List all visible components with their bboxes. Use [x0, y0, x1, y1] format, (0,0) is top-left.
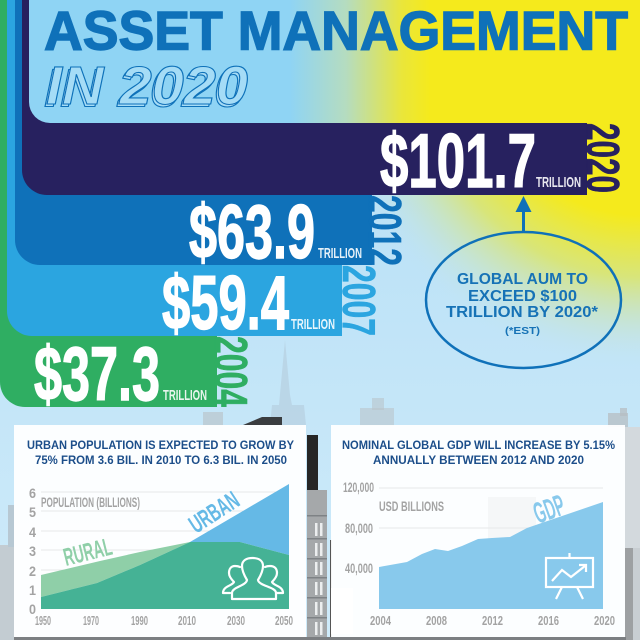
x axis labels: 2008 [426, 613, 447, 628]
callout oval [426, 232, 621, 368]
y axis labels: 40,000 [345, 561, 373, 576]
x axis labels: 1950 [35, 613, 51, 628]
arrow to 2020 bar [516, 196, 532, 233]
label: GDP: GDP [529, 489, 570, 531]
year 2004: 2004 [205, 336, 257, 407]
year 2012: 2012 [359, 195, 411, 266]
urban heading: URBAN POPULATION IS EXPECTED TO GROW BY [27, 440, 294, 452]
value 2012: $63.9 [189, 190, 315, 275]
panel: global GDP [331, 425, 625, 637]
callout text: TRILLION BY 2020* [446, 304, 599, 321]
y axis labels: 80,000 [345, 521, 373, 536]
green bar: 2004 [0, 0, 257, 417]
urban heading [27, 440, 294, 467]
axis title: USD BILLIONS [379, 499, 444, 514]
x axis labels: 1990 [131, 613, 148, 628]
x axis labels: 2050 [275, 613, 293, 628]
unit 2007: TRILLION [291, 316, 335, 333]
title: ASSET MANAGEMENT [44, 0, 628, 62]
subtitle: in 2020: IN 2020 [46, 56, 248, 116]
label: urban: URBAN [184, 486, 245, 539]
year 2020: 2020 [577, 123, 629, 193]
value 2004: $37.3 [34, 332, 160, 417]
x axis labels: 2004 [370, 613, 392, 628]
urban heading: 75% FROM 3.6 BIL. IN 2010 TO 6.3 BIL. IN 2050 [35, 455, 287, 467]
y axis labels: 4 [29, 525, 36, 540]
city skyline background [0, 340, 640, 640]
GDP heading: ANNUALLY BETWEEN 2012 AND 2020 [373, 455, 584, 467]
x axis labels: 1970 [83, 613, 99, 628]
unit 2004: TRILLION [163, 387, 207, 404]
x axis labels [370, 613, 615, 628]
navy bar: 2020 [22, 0, 629, 204]
light blue bar: 2007 [7, 0, 385, 346]
unit 2012: TRILLION [318, 245, 362, 262]
value 2020: $101.7 [380, 119, 536, 204]
y axis labels: 0 [29, 602, 36, 617]
x axis labels: 2020 [594, 613, 615, 628]
x axis labels [35, 613, 293, 628]
x axis labels: 2010 [178, 613, 196, 628]
callout text [446, 271, 599, 337]
y axis labels: 1 [29, 583, 36, 598]
y axis labels: 2 [29, 564, 36, 579]
callout text: GLOBAL AUM TO [457, 271, 588, 288]
y axis labels: 6 [29, 486, 36, 501]
year 2007: 2007 [333, 265, 385, 336]
y axis labels: 5 [29, 505, 36, 520]
icon: presentation board [546, 553, 593, 599]
panel: urban population [14, 425, 306, 637]
GDP area chart [343, 480, 615, 628]
y axis labels: 120,000 [343, 480, 374, 495]
y axis labels [343, 480, 374, 576]
unit 2020: TRILLION [536, 174, 581, 191]
x axis labels: 2016 [538, 613, 559, 628]
y axis labels: 3 [29, 544, 36, 559]
icon: people [223, 558, 283, 599]
title panel [29, 0, 640, 123]
callout text: (*EST) [505, 326, 540, 337]
GDP heading: NOMINAL GLOBAL GDP WILL INCREASE BY 5.15% [342, 440, 615, 452]
value 2007: $59.4 [162, 261, 289, 346]
label: rural: RURAL [61, 533, 115, 572]
population area chart [29, 484, 293, 628]
mid blue bar: 2012 [15, 0, 411, 275]
x axis labels: 2012 [482, 613, 503, 628]
x axis labels: 2030 [227, 613, 245, 628]
callout text: EXCEED $100 [468, 288, 577, 305]
y axis labels [29, 486, 36, 617]
axis title: POPULATION (BILLIONS) [41, 495, 140, 510]
GDP heading [342, 440, 615, 467]
